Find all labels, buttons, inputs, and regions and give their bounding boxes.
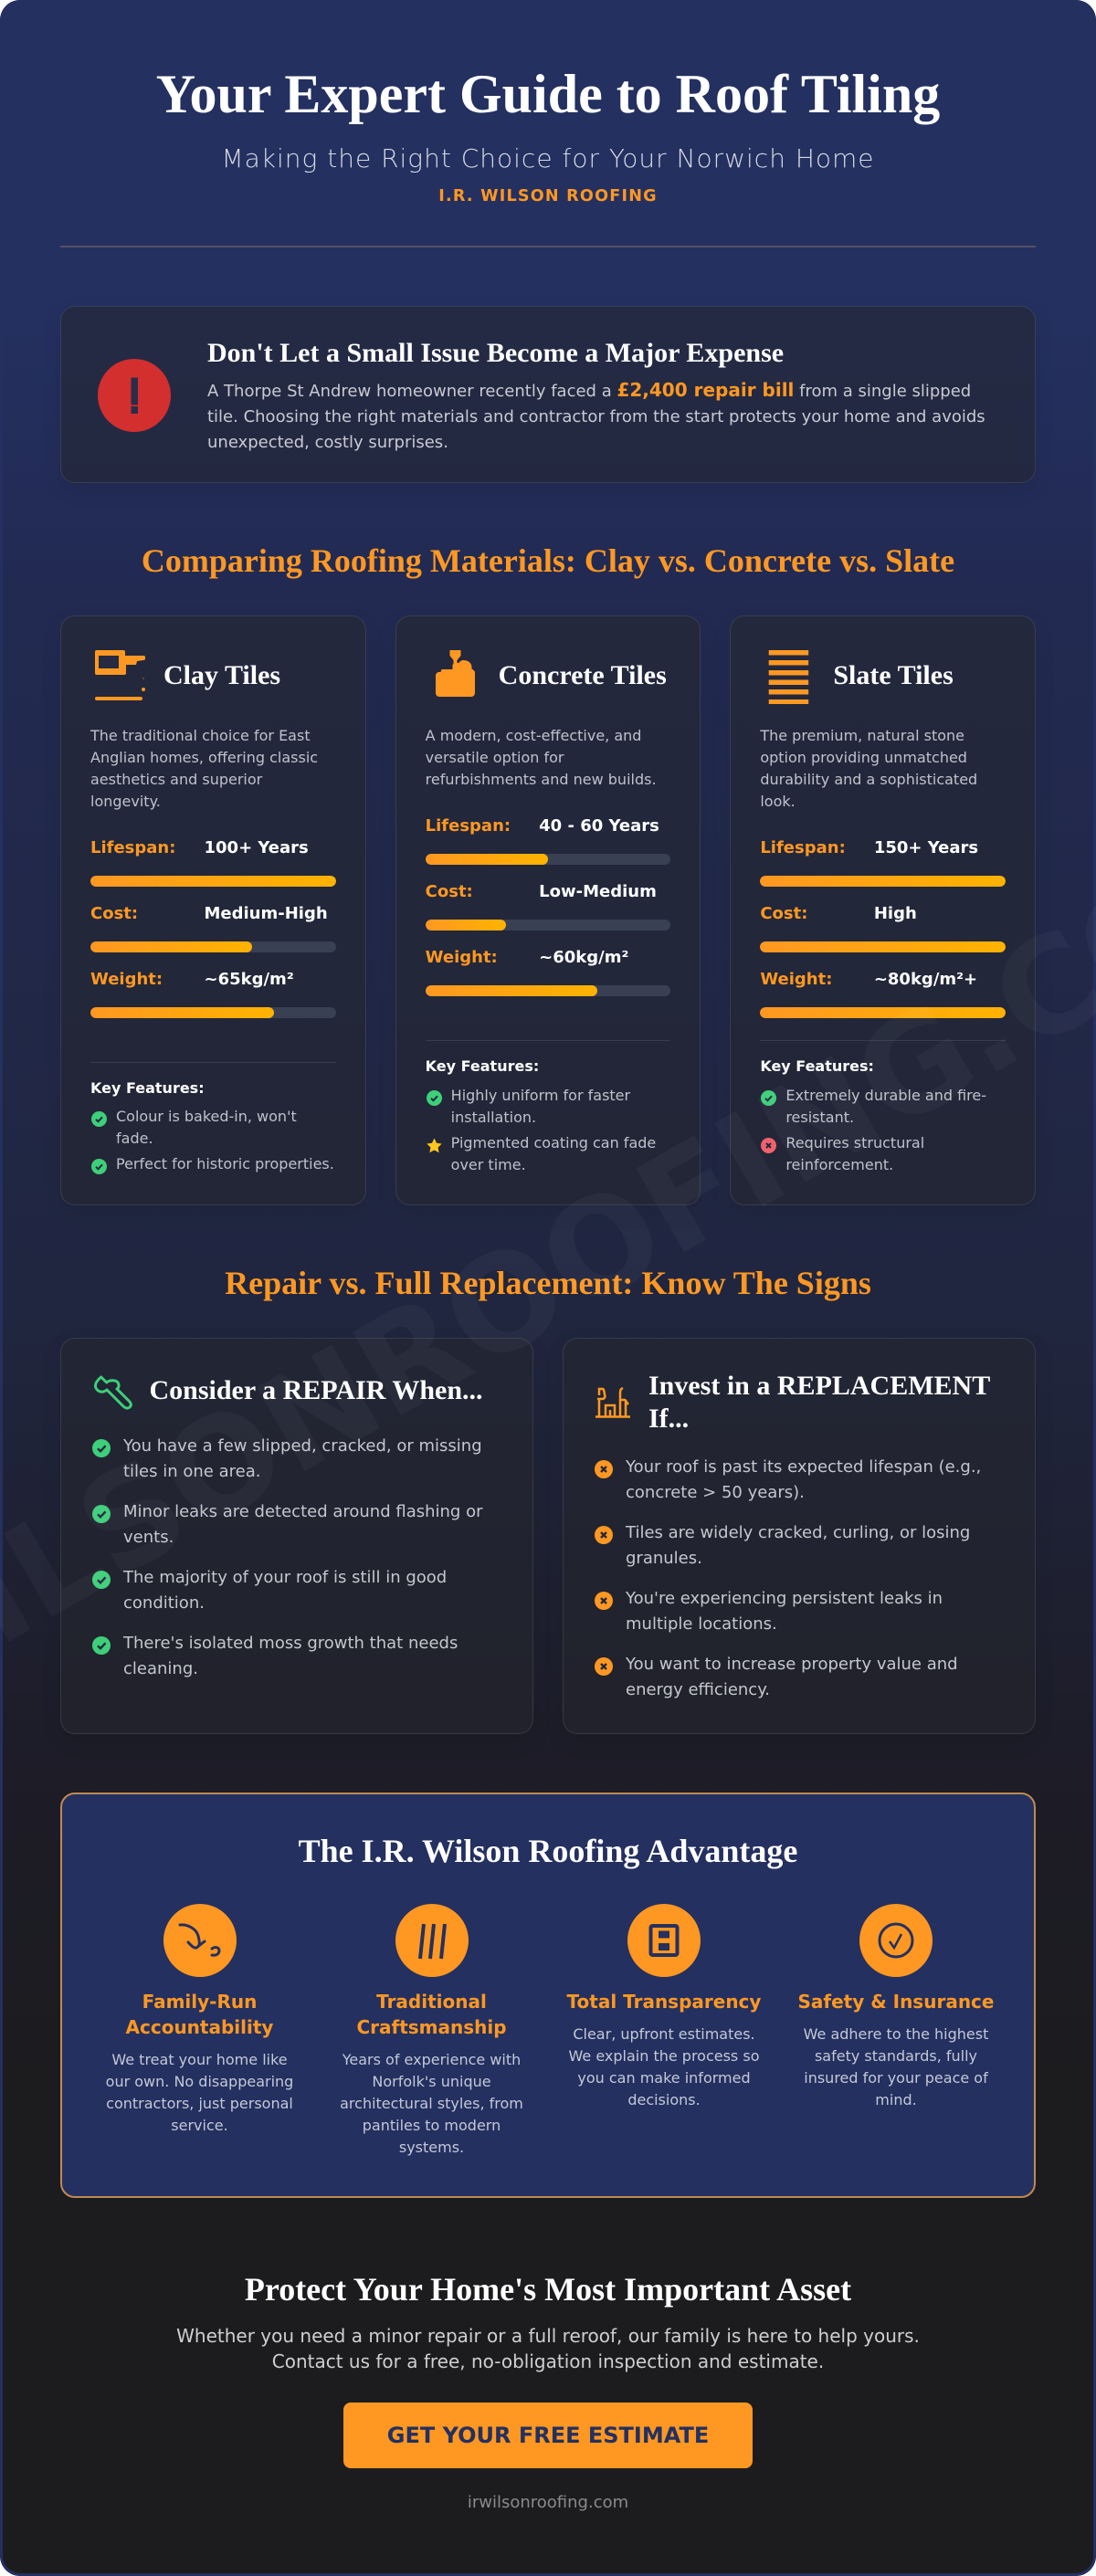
advantage heading: The I.R. Wilson Roofing Advantage [299, 1833, 797, 1869]
feature: colour: fade. [116, 1130, 153, 1147]
text: decisions. [627, 2091, 701, 2108]
item [92, 1502, 482, 1547]
panel: concrete tiles [395, 615, 701, 1205]
website url: irwilsonroofing.com [468, 2493, 628, 2512]
description: aesthetics and superior [90, 771, 262, 788]
text [106, 2051, 293, 2134]
item: vents. [123, 1528, 174, 1547]
icon: concrete mixer [436, 650, 475, 697]
item: You want to increase property value and [626, 1655, 958, 1674]
button: get estimate [343, 2403, 753, 2468]
column: safety [798, 1904, 994, 2108]
text: Clear, upfront estimates. [573, 2025, 755, 2043]
icon: green wrench [93, 1375, 132, 1410]
description: The premium, natural stone [760, 727, 964, 744]
panel heading: If... [648, 1403, 689, 1434]
text: pantiles to modern [363, 2117, 501, 2134]
text: We adhere to the highest [804, 2025, 988, 2043]
heading: Accountability [126, 2016, 273, 2038]
item: condition. [123, 1593, 205, 1613]
weight bar [426, 985, 670, 996]
feature: colour: Colour is baked-in, won't [116, 1108, 297, 1125]
item: tiles in one area. [123, 1462, 260, 1481]
card title: Slate Tiles [833, 660, 954, 690]
weight value: ~65kg/m² [205, 970, 294, 989]
alert heading: Don't Let a Small Issue Become a Major Expense [207, 338, 784, 368]
item: energy efficiency. [626, 1680, 770, 1699]
subtitle: Making the Right Choice for Your Norwich Home [221, 143, 875, 173]
heading [356, 1991, 507, 2038]
heading: Traditional [376, 1991, 487, 2013]
item: Your roof is past its expected lifespan (e.g., [626, 1457, 981, 1477]
item [595, 1655, 958, 1699]
brand name: I.R. WILSON ROOFING [438, 187, 658, 205]
panel: advantage [60, 1793, 1036, 2198]
item [595, 1457, 981, 1502]
key features heading: Key Features: [90, 1079, 205, 1096]
stat: lifespan: Lifespan: [760, 838, 846, 857]
feature: colour [91, 1108, 297, 1147]
panel: repair [60, 1338, 533, 1734]
text: Years of experience with [342, 2051, 521, 2068]
description [426, 727, 657, 788]
description: option providing unmatched [760, 749, 967, 766]
text [569, 2025, 759, 2108]
heading [126, 1991, 273, 2038]
description: refurbishments and new builds. [426, 771, 657, 788]
call to action text: Contact us for a free, no-obligation inspection and estimate. [272, 2350, 824, 2372]
cost bar [760, 941, 1006, 952]
icon: orange house outline [595, 1386, 630, 1418]
panel: replacement [563, 1338, 1036, 1734]
card title: Clay Tiles [163, 660, 280, 690]
lifespan value: 100+ Years [205, 838, 309, 857]
column: transparency [566, 1904, 761, 2108]
icon: family [163, 1904, 236, 1977]
stat: lifespan: Lifespan: [90, 838, 175, 857]
panel heading [648, 1370, 990, 1434]
stat: cost: Cost: [760, 904, 807, 923]
feature: fading coating [427, 1134, 656, 1172]
key features heading: Key Features: [760, 1057, 874, 1074]
item: Minor leaks are detected around flashing or [123, 1502, 482, 1521]
heading: Total Transparency [567, 1991, 761, 2013]
item: cleaning. [123, 1659, 198, 1678]
feature: durable [761, 1087, 986, 1125]
feature: fading coating: Pigmented coating can fade [451, 1134, 656, 1151]
description: Anglian homes, offering classic [90, 749, 318, 766]
weight bar [760, 1007, 1006, 1018]
description: The traditional choice for East [90, 727, 311, 744]
item: concrete > 50 years). [626, 1483, 805, 1502]
cost value: High [874, 904, 917, 923]
section heading: repair vs replacement: Repair vs. Full Replacement: Know The Signs [225, 1265, 871, 1301]
item: Tiles are widely cracked, curling, or losing [626, 1523, 970, 1542]
lifespan bar [90, 876, 336, 887]
text: our own. No disappearing [106, 2073, 293, 2090]
item: You have a few slipped, cracked, or missing [123, 1436, 482, 1456]
feature: reinforcement: reinforcement. [785, 1156, 893, 1172]
card title: Concrete Tiles [499, 660, 667, 690]
feature: uniform: Highly uniform for faster [451, 1087, 630, 1103]
header divider [60, 246, 1036, 247]
item: The majority of your roof is still in good [123, 1568, 447, 1587]
stat: weight: Weight: [760, 970, 832, 989]
text: architectural styles, from [340, 2095, 523, 2112]
panel heading: Invest in a REPLACEMENT [648, 1370, 990, 1401]
text [340, 2051, 523, 2156]
feature: historic: Perfect for historic properties. [116, 1155, 334, 1172]
description [90, 727, 318, 810]
call to action text [176, 2325, 920, 2372]
column: family-run [106, 1904, 293, 2134]
text: you can make informed [577, 2069, 751, 2087]
item: multiple locations. [626, 1614, 777, 1634]
heading: Craftsmanship [356, 2016, 507, 2038]
icon: clay tile [95, 650, 145, 700]
button: get estimate: GET YOUR FREE ESTIMATE [387, 2423, 709, 2448]
feature: fading coating: over time. [451, 1156, 526, 1172]
icon: red warning circle [98, 359, 171, 432]
cost bar [426, 920, 670, 931]
feature: reinforcement [761, 1134, 924, 1172]
feature: uniform: installation. [451, 1109, 536, 1125]
alert body text [207, 379, 985, 452]
column: craftsmanship [340, 1904, 523, 2156]
description: longevity. [90, 793, 161, 810]
text: contractors, just personal [106, 2095, 293, 2112]
section heading: materials: Comparing Roofing Materials: Clay vs. Concrete vs. Slate [142, 542, 954, 579]
panel: slate tiles [730, 615, 1036, 1205]
cost value: Low-Medium [539, 882, 657, 901]
stat: cost: Cost: [90, 904, 138, 923]
weight value: ~80kg/m²+ [874, 970, 977, 989]
alert body text: unexpected, costly surprises. [207, 433, 448, 452]
description: look. [760, 793, 796, 810]
lifespan bar [426, 854, 670, 865]
lifespan value: 40 - 60 Years [539, 816, 659, 836]
stat: lifespan: Lifespan: [426, 816, 511, 836]
item: granules. [626, 1549, 702, 1568]
text: mind. [875, 2091, 917, 2108]
stat: cost: Cost: [426, 882, 473, 901]
stat: weight: Weight: [426, 948, 498, 967]
call to action text: Whether you need a minor repair or a full reroof, our family is here to help yours. [176, 2325, 920, 2347]
item: You're experiencing persistent leaks in [626, 1589, 943, 1608]
weight value: ~60kg/m² [539, 948, 628, 967]
item: There's isolated moss growth that needs [123, 1634, 458, 1653]
feature: reinforcement: Requires structural [785, 1134, 924, 1151]
feature: durable: Extremely durable and fire- [785, 1087, 986, 1103]
description: versatile option for [426, 749, 564, 766]
heading: Family-Run [142, 1991, 257, 2013]
weight bar [90, 1007, 336, 1018]
stat: weight: Weight: [90, 970, 163, 989]
lifespan value: 150+ Years [874, 838, 978, 857]
text: insured for your peace of [804, 2069, 988, 2087]
feature: uniform [427, 1087, 630, 1125]
alert body text: A Thorpe St Andrew homeowner recently faced a £2,400 repair bill from a single slipped [207, 379, 971, 401]
item [595, 1523, 970, 1568]
text [804, 2025, 988, 2108]
panel: clay tiles [60, 615, 366, 1205]
cost bar [90, 941, 336, 952]
item [92, 1436, 482, 1481]
cost value: Medium-High [205, 904, 328, 923]
description: A modern, cost-effective, and [426, 727, 641, 744]
text: We treat your home like [111, 2051, 288, 2068]
description: durability and a sophisticated [760, 771, 977, 788]
description [760, 727, 977, 810]
text: systems. [399, 2139, 464, 2156]
icon: three strokes [395, 1904, 468, 1977]
lifespan bar [760, 876, 1006, 887]
call to action heading: Protect Your Home's Most Important Asset [245, 2271, 851, 2308]
alert body text: tile. Choosing the right materials and contractor from the start protects your home and avoids [207, 407, 985, 426]
heading: Safety & Insurance [798, 1991, 994, 2013]
text: We explain the process so [569, 2047, 759, 2065]
text: safety standards, fully [815, 2047, 977, 2065]
key features heading: Key Features: [426, 1057, 539, 1074]
icon: slate stack [769, 650, 809, 704]
text: Norfolk's unique [372, 2073, 491, 2090]
panel heading: Consider a REPAIR When... [150, 1375, 483, 1405]
item [595, 1589, 943, 1634]
panel: alert callout [60, 306, 1036, 483]
feature: durable: resistant. [785, 1109, 854, 1125]
icon: document [627, 1904, 701, 1977]
item [92, 1568, 447, 1613]
title: Your Expert Guide to Roof Tiling [156, 64, 940, 124]
icon: check badge [859, 1904, 933, 1977]
text: service. [171, 2117, 228, 2134]
item [92, 1634, 458, 1678]
